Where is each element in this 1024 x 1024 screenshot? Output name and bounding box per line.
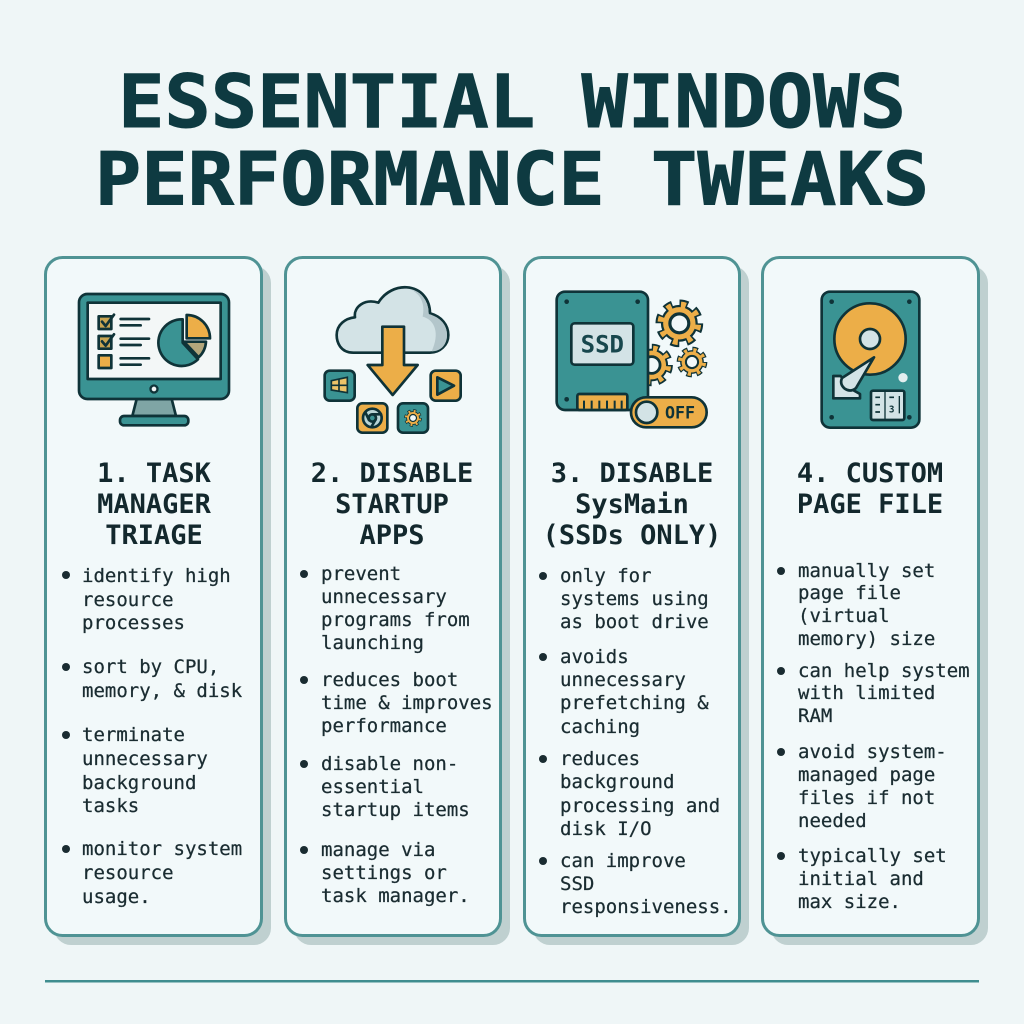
bullet list: resource bbox=[82, 862, 174, 884]
heading: TRIAGE bbox=[105, 520, 203, 551]
heading: 3. DISABLE bbox=[551, 458, 713, 489]
bullet list: needed bbox=[798, 810, 867, 832]
bullet list: unnecessary bbox=[560, 669, 686, 691]
bullet list: processes bbox=[82, 612, 185, 634]
bullet list: tasks bbox=[82, 795, 139, 817]
bullet list: monitor system bbox=[82, 838, 242, 860]
heading: STARTUP bbox=[335, 489, 449, 520]
heading: PAGE FILE bbox=[797, 489, 943, 520]
title: PERFORMANCE TWEAKS bbox=[95, 136, 929, 222]
bullet list: only for bbox=[560, 565, 652, 587]
bullet list: avoid system- bbox=[798, 741, 947, 763]
bullet list bbox=[539, 565, 732, 918]
icon: hard disk drive bbox=[822, 292, 919, 428]
bullet list: (virtual bbox=[798, 605, 890, 627]
title bbox=[95, 59, 929, 222]
bullet list: systems using bbox=[560, 588, 709, 610]
icon: SSD with gears and off switch: OFF bbox=[665, 403, 695, 422]
bullet list: typically set bbox=[798, 845, 947, 867]
bullet list: memory) size bbox=[798, 628, 935, 650]
heading: (SSDs ONLY) bbox=[543, 520, 721, 551]
bullet list: initial and bbox=[798, 868, 924, 890]
bullet list: unnecessary bbox=[82, 748, 208, 770]
heading bbox=[311, 458, 473, 551]
bullet list: page file bbox=[798, 582, 901, 604]
heading bbox=[543, 458, 721, 551]
bullet list: can improve bbox=[560, 850, 686, 872]
bullet list bbox=[300, 563, 493, 907]
bullet list: as boot drive bbox=[560, 611, 709, 633]
bullet list: background bbox=[82, 772, 196, 794]
panel: disable startup apps bbox=[286, 258, 510, 945]
heading: 4. CUSTOM bbox=[797, 458, 943, 489]
heading: SysMain bbox=[575, 489, 689, 520]
heading: 2. DISABLE bbox=[311, 458, 473, 489]
bullet list: manage via bbox=[321, 839, 435, 861]
panel: custom page file bbox=[762, 258, 988, 945]
bullet list: launching bbox=[321, 632, 424, 654]
bullet list: essential bbox=[321, 776, 424, 798]
bullet list: settings or bbox=[321, 862, 447, 884]
icon: monitor with checklist and pie chart bbox=[79, 294, 229, 425]
bullet list: managed page bbox=[798, 764, 935, 786]
bullet list bbox=[777, 560, 970, 913]
bullet list: can help system bbox=[798, 660, 970, 682]
title: ESSENTIAL WINDOWS bbox=[118, 59, 906, 145]
bullet list: manually set bbox=[798, 560, 935, 582]
panel: disable SysMain bbox=[524, 258, 749, 945]
icon: cloud download with app tiles bbox=[325, 287, 461, 433]
bullet list: disable non- bbox=[321, 753, 458, 775]
icon: SSD with gears and off switch bbox=[557, 292, 707, 427]
bullet list: sort by CPU, bbox=[82, 656, 219, 678]
bullet list: SSD bbox=[560, 873, 594, 895]
bullet list: reduces boot bbox=[321, 669, 458, 691]
heading: 1. TASK bbox=[97, 458, 212, 489]
bullet list: with limited bbox=[798, 682, 935, 704]
bullet list: reduces bbox=[560, 748, 640, 770]
bullet list: background bbox=[560, 771, 674, 793]
bullet list: time & improves bbox=[321, 692, 493, 714]
heading bbox=[797, 458, 943, 520]
bullet list: prevent bbox=[321, 563, 401, 585]
bullet list: RAM bbox=[798, 705, 832, 727]
bullet list: resource bbox=[82, 589, 174, 611]
bullet list: startup items bbox=[321, 799, 470, 821]
bullet list: avoids bbox=[560, 646, 629, 668]
bullet list: terminate bbox=[82, 724, 185, 746]
bullet list: identify high bbox=[82, 565, 231, 587]
bullet list: max size. bbox=[798, 891, 901, 913]
bullet list: programs from bbox=[321, 609, 470, 631]
bullet list: usage. bbox=[82, 886, 151, 908]
heading: APPS bbox=[359, 520, 425, 551]
bullet list: prefetching & bbox=[560, 692, 709, 714]
icon: SSD with gears and off switch: SSD bbox=[581, 331, 624, 359]
bullet list: memory, & disk bbox=[82, 680, 243, 702]
heading bbox=[97, 458, 212, 551]
bullet list: caching bbox=[560, 716, 640, 738]
bullet list: unnecessary bbox=[321, 586, 447, 608]
bullet list: performance bbox=[321, 715, 447, 737]
heading: MANAGER bbox=[97, 489, 212, 520]
bullet list: task manager. bbox=[321, 885, 470, 907]
bullet list: disk I/O bbox=[560, 818, 652, 840]
bullet list bbox=[62, 565, 243, 908]
bullet list: responsiveness. bbox=[560, 896, 732, 918]
bullet list: files if not bbox=[798, 787, 935, 809]
bullet list: processing and bbox=[560, 795, 720, 817]
panel: task manager triage bbox=[46, 258, 271, 945]
icon: hard disk drive: 3 bbox=[889, 405, 895, 416]
